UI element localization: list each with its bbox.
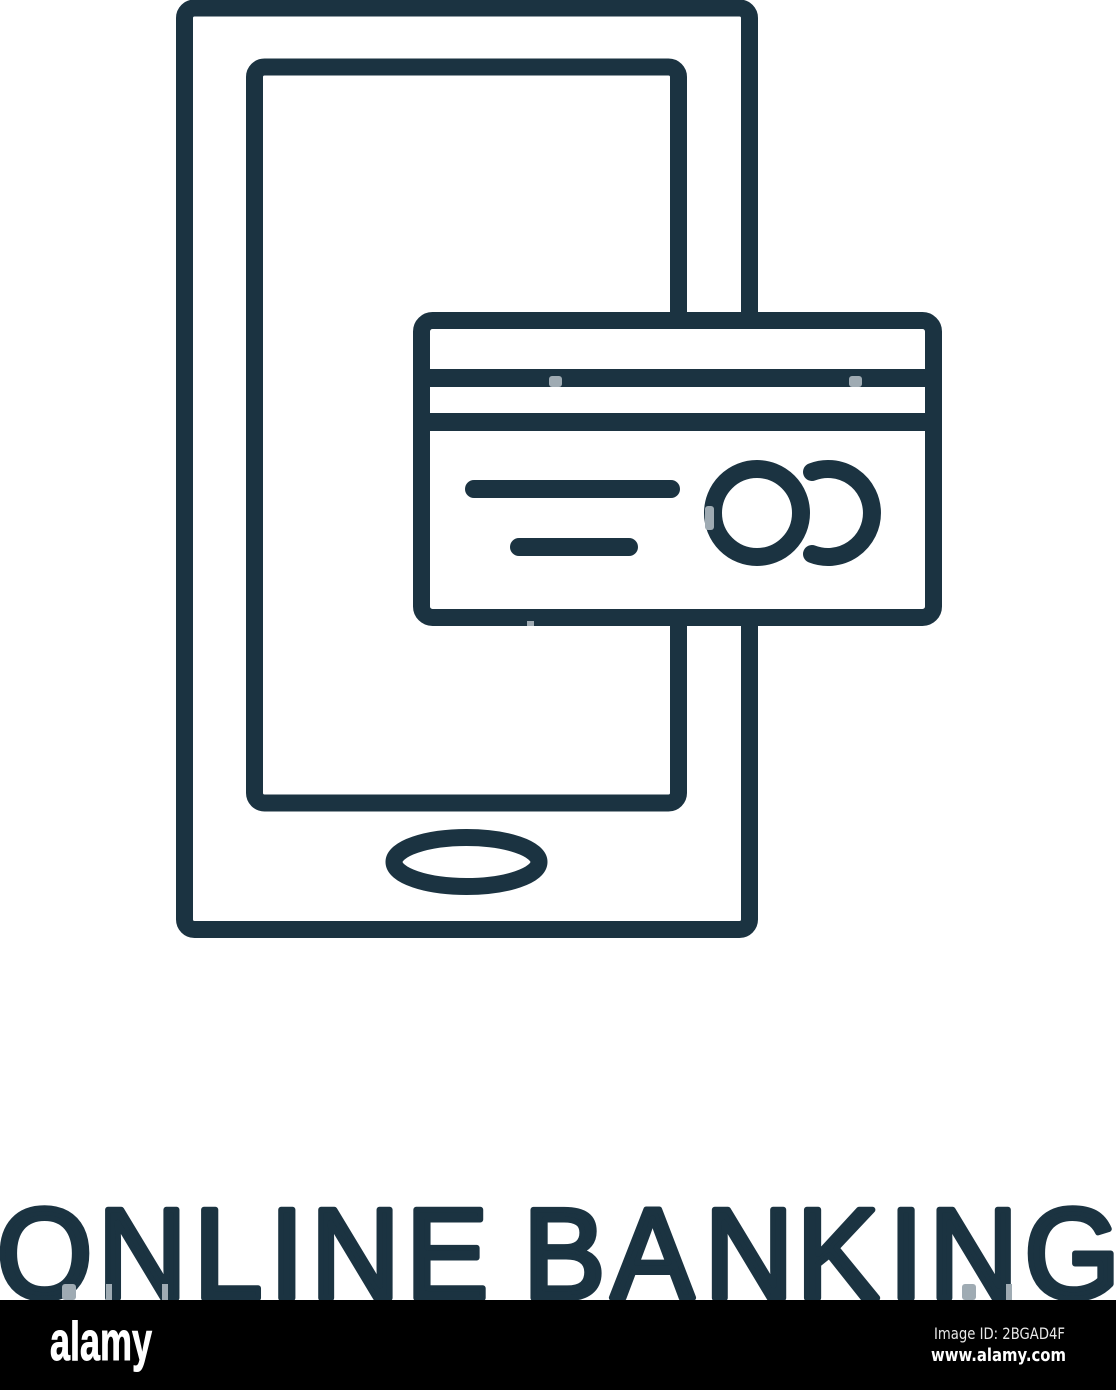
title: ONLINE BANKING — [0, 1182, 1116, 1326]
footer logo: alamy — [50, 1310, 152, 1372]
icon: smartphone with credit card — [184, 8, 934, 930]
card logo circle — [713, 469, 801, 557]
icon: phone body — [184, 8, 750, 930]
footer bar — [0, 1300, 1116, 1390]
card number lines — [474, 489, 671, 547]
icon: credit card — [422, 320, 934, 618]
watermark fragments — [62, 376, 1012, 1300]
image id: Image ID: 2BGAD4F — [934, 1324, 1065, 1343]
card logo arc — [812, 469, 872, 557]
icon: phone home button — [394, 838, 539, 886]
card outline — [422, 320, 934, 618]
icon: phone screen — [254, 67, 678, 803]
card magnetic stripe — [422, 378, 933, 422]
website address: www.alamy.com — [931, 1345, 1066, 1366]
